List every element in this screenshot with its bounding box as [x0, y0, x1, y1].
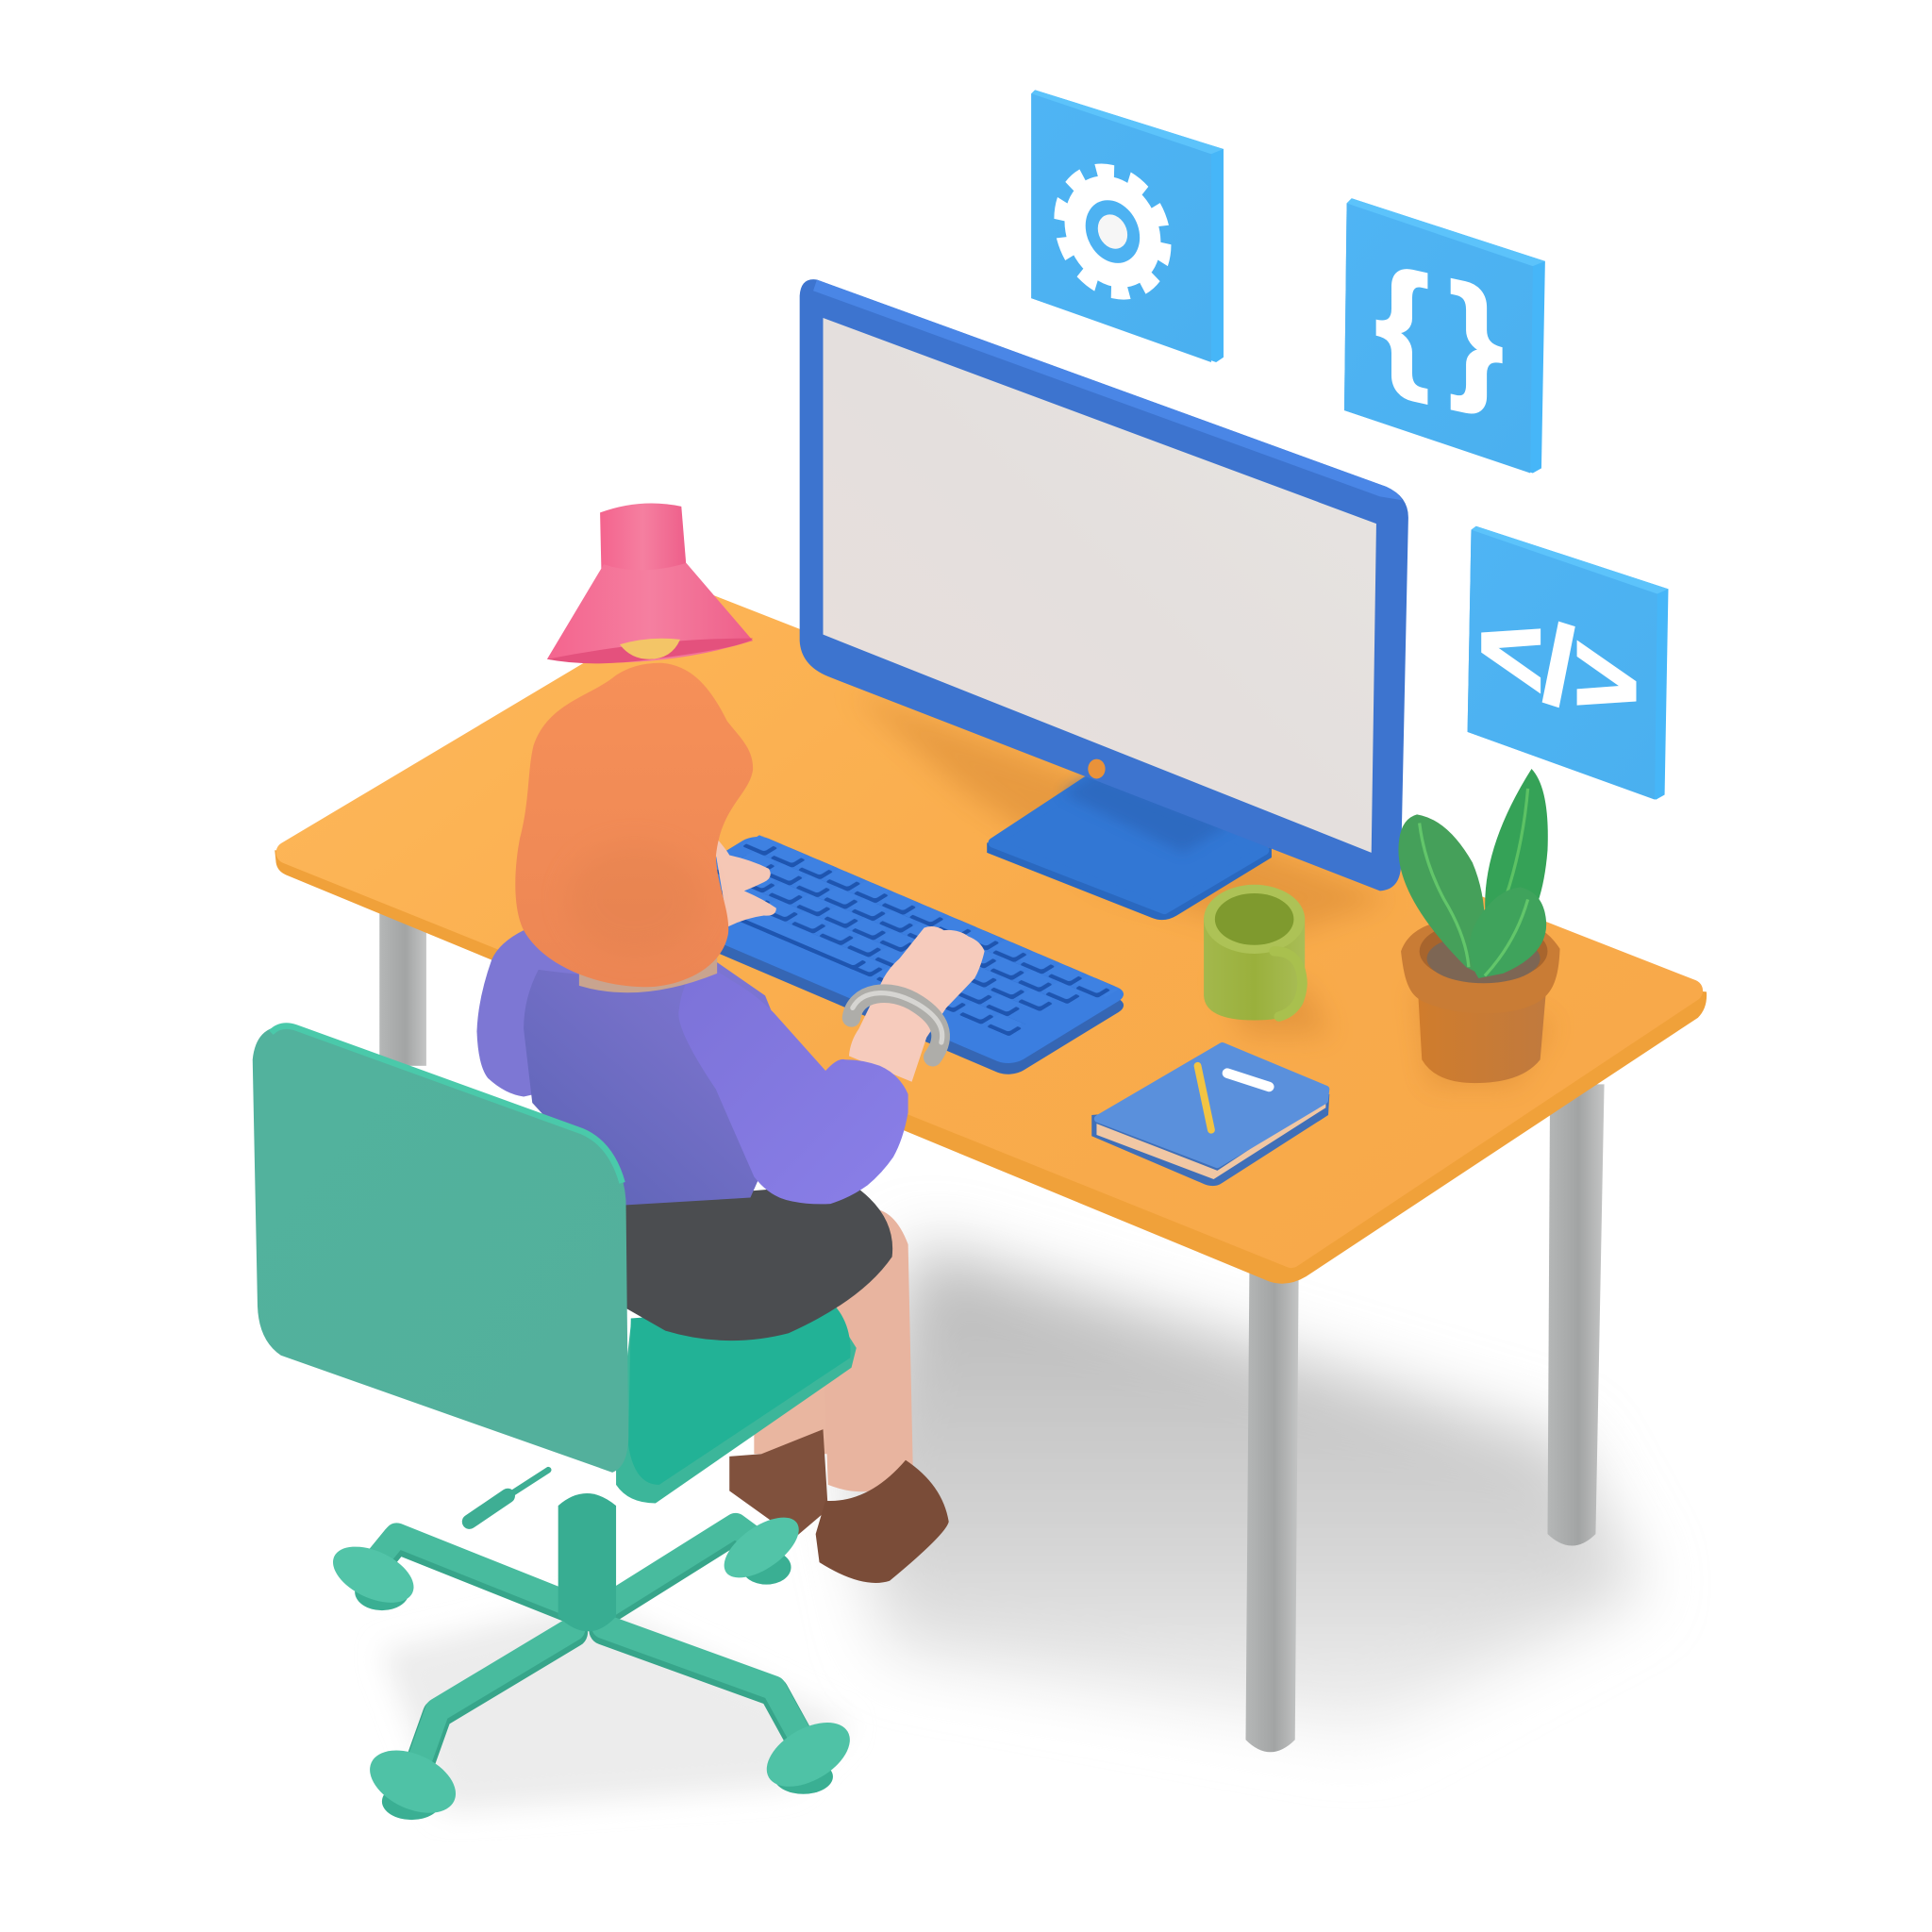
person: torso and head — [476, 663, 985, 1341]
sweater: torso — [524, 962, 801, 1205]
monitor screen — [823, 318, 1376, 853]
office chair: base and seat — [325, 1304, 860, 1825]
panel: gear — [1031, 90, 1224, 362]
chair column — [558, 1493, 616, 1631]
notebook pages — [1096, 1099, 1325, 1179]
lamp underside — [547, 639, 753, 663]
plant pot body — [1417, 974, 1547, 1083]
pencil — [1198, 1066, 1211, 1130]
plant pot inner — [1420, 921, 1547, 982]
leg: near — [823, 1208, 913, 1491]
plant — [1398, 769, 1560, 1083]
icon: curly braces: } — [1449, 256, 1503, 421]
bangle — [852, 993, 942, 1058]
leg: far — [754, 1380, 830, 1454]
lamp shade cap — [600, 503, 687, 575]
hand: far — [712, 833, 776, 926]
notebook label — [1227, 1074, 1269, 1087]
table leg: front — [1245, 1269, 1299, 1752]
keyboard body top — [635, 833, 1131, 1067]
chair back shell — [253, 1026, 628, 1473]
leaf: left — [1398, 814, 1485, 974]
shoe: far — [729, 1429, 828, 1538]
chair seat underside — [616, 1311, 857, 1503]
notebook cover — [1098, 1046, 1325, 1164]
floor shadow — [382, 1244, 1645, 1811]
panel: braces — [1344, 198, 1545, 474]
power light — [1088, 759, 1106, 778]
desk top — [287, 604, 1691, 1257]
monitor top highlight — [813, 279, 1402, 500]
mug — [1204, 885, 1305, 1020]
table leg: back left — [379, 912, 426, 1066]
monitor — [800, 279, 1408, 891]
shoe: near — [816, 1460, 949, 1583]
mug body — [1204, 918, 1305, 1020]
stand base top — [993, 781, 1264, 909]
panel: code tag — [1468, 526, 1668, 800]
desk edge — [275, 850, 1707, 1284]
table leg: back right — [1547, 1084, 1605, 1546]
icon: code tag: </> — [1478, 578, 1639, 753]
keyboard keys — [668, 835, 1120, 1044]
chair lever — [468, 1470, 548, 1522]
mug rim — [1204, 885, 1305, 954]
chair wheels — [325, 1506, 860, 1825]
lamp bulb — [620, 639, 680, 659]
person: lower legs and shoes — [729, 1208, 949, 1583]
desk surface shadows — [850, 690, 1553, 1084]
neck — [579, 955, 717, 992]
mug inside — [1215, 893, 1293, 945]
keyboard body side — [635, 844, 1131, 1078]
monitor frame — [800, 279, 1408, 891]
lamp shade cone — [547, 563, 753, 663]
monitor stand — [987, 772, 1272, 920]
sweater: near arm — [678, 962, 908, 1204]
hair shading — [567, 844, 702, 955]
chair back top highlight — [271, 1026, 623, 1183]
leaf: front — [1470, 887, 1546, 978]
leaf: back — [1485, 769, 1548, 937]
chair seat top — [628, 1304, 851, 1485]
notebook — [1091, 1046, 1329, 1186]
chair base — [375, 1525, 801, 1766]
plant soil — [1426, 934, 1541, 983]
forearm and hand: near — [849, 926, 985, 1082]
desk — [275, 604, 1707, 1284]
hair — [515, 663, 753, 987]
icon: curly braces — [1375, 239, 1503, 421]
icon: gear — [1062, 163, 1163, 300]
mug handle — [1274, 951, 1303, 1017]
lamp — [547, 503, 753, 663]
skirt — [623, 1183, 892, 1341]
office chair: back — [253, 1026, 628, 1473]
plant pot rim — [1401, 918, 1560, 1013]
stand neck shade — [1062, 772, 1232, 853]
keyboard — [635, 833, 1131, 1078]
icon: curly braces: { — [1375, 239, 1429, 405]
notebook back cover — [1091, 1094, 1329, 1186]
sweater: far arm — [476, 930, 579, 1096]
stand base edge — [987, 842, 1272, 920]
